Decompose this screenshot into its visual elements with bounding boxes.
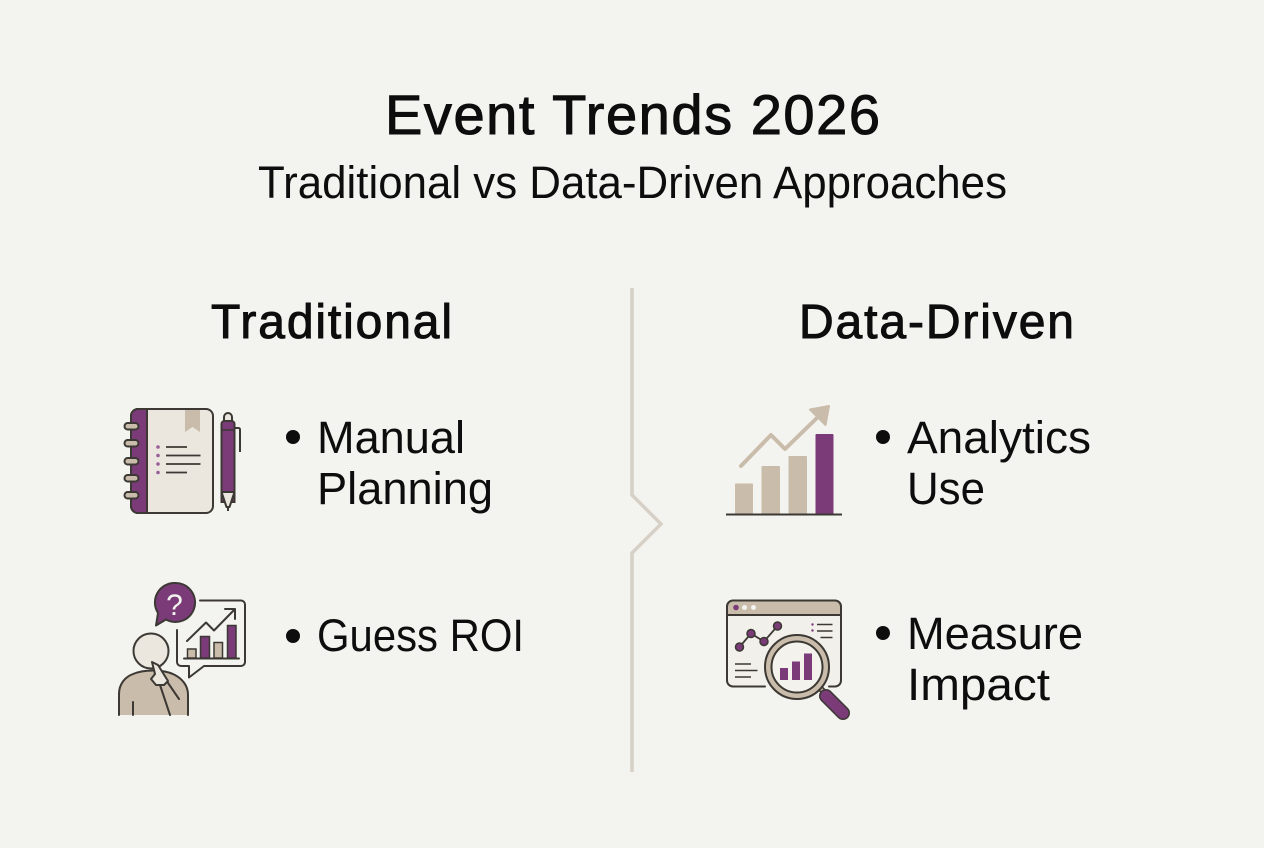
bullet: measure impact [876, 608, 1083, 710]
heading: data-driven: Data-Driven [799, 296, 1074, 349]
center divider with chevron [632, 288, 661, 772]
title: Event Trends 2026 [385, 83, 880, 146]
bullet: guess roi: Guess ROI [317, 610, 524, 661]
icon: rising bar chart [726, 406, 842, 514]
bullet: manual planning: Manual [317, 412, 465, 463]
heading: traditional: Traditional [211, 296, 452, 349]
panel: data-driven [726, 296, 1091, 713]
icon: notebook and pen [124, 409, 240, 513]
bullet: measure impact: Impact [907, 659, 1051, 710]
icon: person wondering about ROI: ? [166, 589, 183, 622]
icon: dashboard under magnifying glass [727, 600, 843, 713]
subtitle: Traditional vs Data-Driven Approaches [258, 157, 1007, 208]
bullet: analytics use [876, 412, 1091, 514]
bullet: analytics use: Analytics [907, 412, 1091, 463]
bullet: manual planning [286, 412, 493, 514]
panel: traditional [119, 296, 524, 715]
bullet: manual planning: Planning [317, 463, 493, 514]
bullet: analytics use: Use [907, 463, 985, 514]
icon: person wondering about ROI [119, 583, 245, 715]
bullet: measure impact: Measure [907, 608, 1083, 659]
